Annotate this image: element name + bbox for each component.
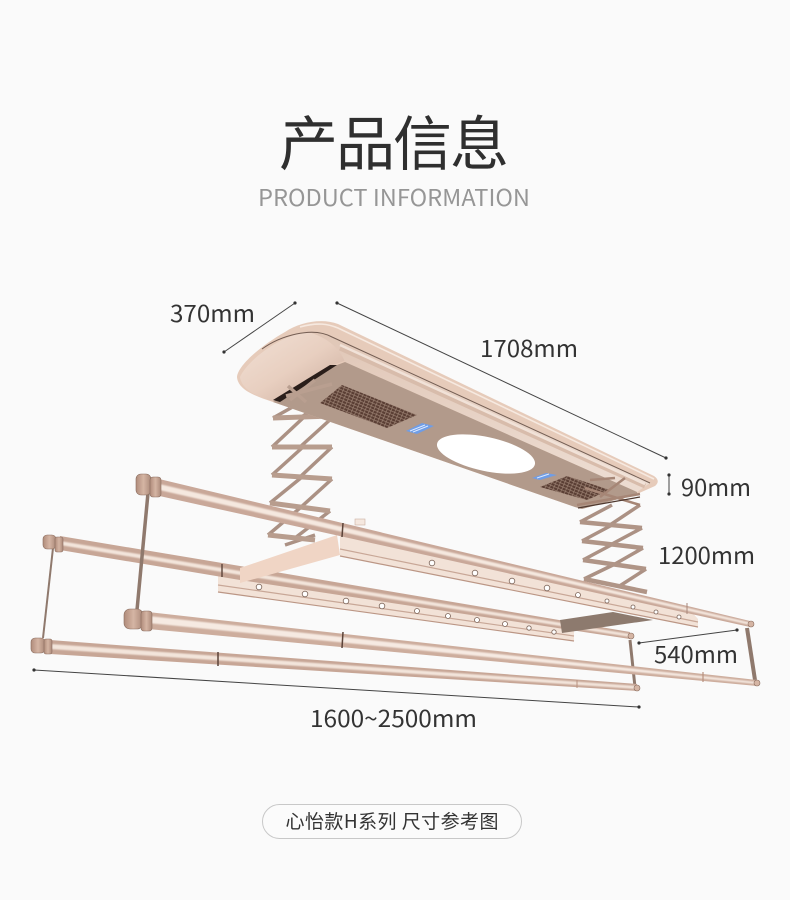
ceiling unit — [237, 321, 658, 509]
top rim highlight — [300, 324, 654, 479]
subtitle: PRODUCT INFORMATION — [258, 179, 530, 213]
light indicators — [406, 423, 434, 434]
dimension: 540mm — [637, 628, 739, 670]
body shell — [237, 321, 658, 509]
dimension: 1708mm — [335, 301, 668, 460]
scissor top left — [286, 380, 332, 402]
dimension: 1600~2500mm — [32, 668, 641, 734]
hook holes — [256, 560, 681, 634]
hanger rods — [43, 493, 755, 687]
right vent — [540, 476, 610, 500]
left bracket — [240, 535, 340, 583]
rail end caps — [31, 474, 760, 691]
left vent — [320, 385, 417, 428]
left scissor lift — [268, 397, 332, 545]
dimension: 1600~2500mm: 1600~2500mm — [310, 700, 477, 734]
dimension: 370mm — [170, 295, 297, 354]
rail 2 — [60, 536, 630, 639]
caption pill — [262, 804, 522, 838]
underside panel — [273, 362, 637, 509]
light indicator right — [532, 473, 557, 480]
rail 4 — [50, 640, 637, 691]
right scissor lift — [580, 505, 647, 592]
title: 产品信息 — [279, 97, 509, 182]
rear long channel — [340, 533, 698, 627]
dimension: 1200mm: 1200mm — [658, 537, 755, 571]
dimension: 370mm: 370mm — [170, 295, 255, 329]
dimension: 1708mm: 1708mm — [480, 330, 578, 364]
rail 3 — [148, 612, 757, 686]
round lamp — [434, 427, 538, 481]
front band — [303, 331, 650, 492]
caption pill: 心怡款H系列 尺寸参考图 — [286, 807, 498, 834]
end cap — [240, 333, 347, 402]
dimension: 540mm: 540mm — [654, 636, 738, 670]
scissor top right — [577, 478, 640, 505]
dimension: 90mm: 90mm — [681, 469, 751, 503]
dark edge line — [262, 332, 650, 483]
product illustration: drying rack — [31, 321, 760, 691]
left slot — [273, 365, 337, 402]
front channel — [218, 575, 574, 641]
dark bracket — [560, 612, 653, 633]
rail 1 — [155, 478, 750, 627]
